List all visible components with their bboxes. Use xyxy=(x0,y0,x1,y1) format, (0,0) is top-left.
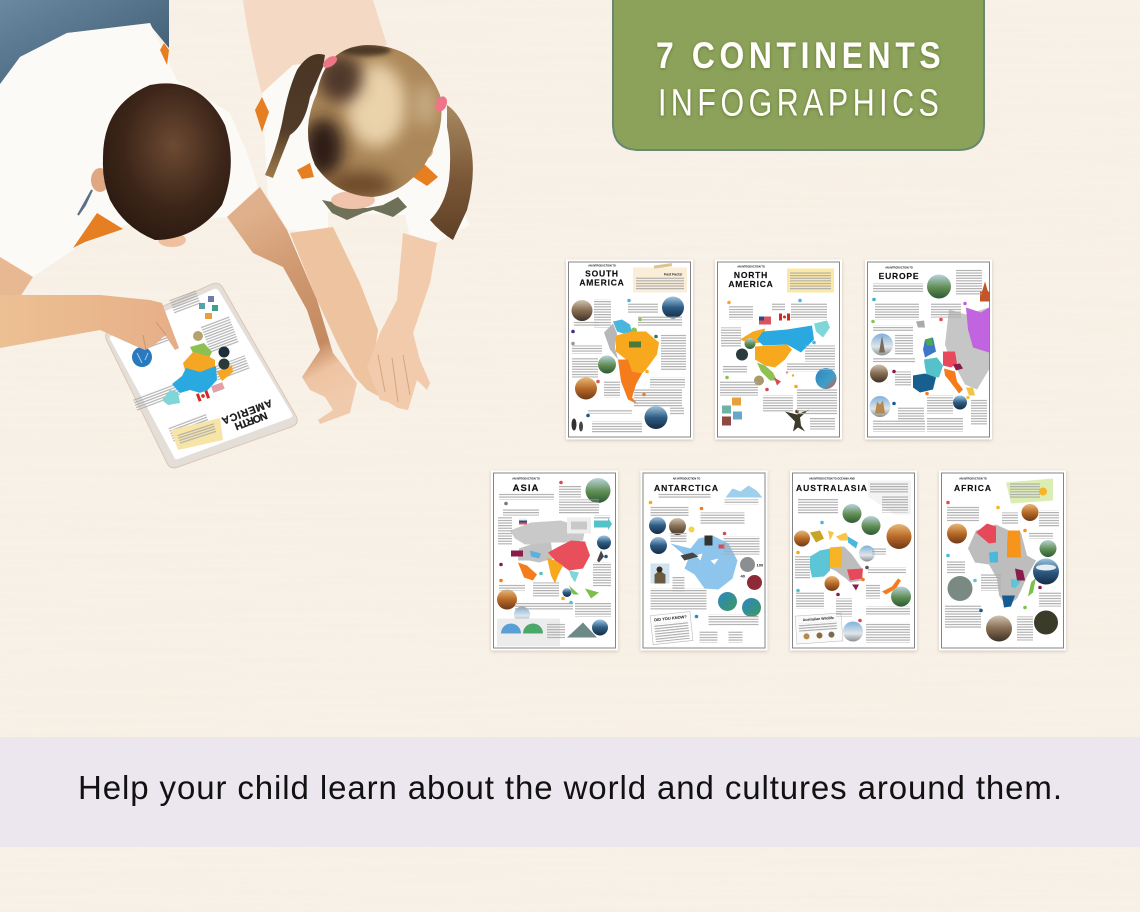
poster title: AMERICA xyxy=(728,279,774,289)
flags xyxy=(511,518,527,556)
numbers: 100 xyxy=(756,562,764,568)
section markers xyxy=(871,298,970,405)
poster title: AMERICA xyxy=(579,278,625,288)
title line 2: INFOGRAPHICS xyxy=(658,82,939,124)
numbers xyxy=(740,562,764,578)
poster title: AN INTRODUCTION TO OCEANIA AND xyxy=(809,478,855,480)
text blocks xyxy=(572,300,686,434)
text blocks xyxy=(650,494,760,642)
tablet screen: photo circles and flags xyxy=(132,296,230,402)
poster title: AUSTRALASIA xyxy=(796,483,868,493)
section markers xyxy=(499,481,608,604)
grey note xyxy=(868,480,911,514)
photos xyxy=(497,478,611,636)
poster title xyxy=(512,478,540,494)
did you know note xyxy=(650,612,693,645)
yellow note xyxy=(787,268,834,292)
St Basil's illustration xyxy=(980,282,990,302)
Australian wildlife note xyxy=(795,613,843,644)
poster title xyxy=(654,478,719,493)
photos xyxy=(794,504,912,642)
map xyxy=(913,308,989,396)
fast facts note xyxy=(633,263,687,292)
map xyxy=(968,524,1036,608)
tablet xyxy=(105,282,297,468)
poster: Antarctica xyxy=(640,470,768,650)
text blocks xyxy=(795,498,910,642)
photos xyxy=(722,338,836,426)
tablet screen: title upside down: AMERICA xyxy=(220,397,274,427)
poster title: NORTH xyxy=(734,270,768,280)
poster title: SOUTH xyxy=(585,268,619,278)
world minimap and arrow xyxy=(567,518,612,534)
text blocks xyxy=(873,270,987,432)
poster title: AN INTRODUCTION TO xyxy=(959,478,987,480)
photos xyxy=(572,296,684,432)
girl: pigtail right xyxy=(430,105,473,240)
section markers xyxy=(946,501,1042,612)
map xyxy=(604,320,659,404)
title banner xyxy=(613,0,984,150)
map xyxy=(670,536,738,590)
did you know note: DID YOU KNOW? xyxy=(654,614,688,622)
athlete figure xyxy=(785,410,809,432)
boy: head xyxy=(91,83,231,247)
fast facts note: Fast Facts! xyxy=(664,272,682,276)
poster title: EUROPE xyxy=(879,271,919,281)
poster title: AFRICA xyxy=(954,483,992,493)
flags xyxy=(759,314,790,324)
poster title: ASIA xyxy=(513,483,539,494)
girl: left arm and hand xyxy=(290,227,383,397)
caption text: Help your child learn about the world and cultures around them. xyxy=(78,769,1062,806)
title line 1: 7 CONTINENTS xyxy=(656,36,941,77)
poster title: AN INTRODUCTION TO xyxy=(588,264,616,268)
section markers xyxy=(571,299,658,417)
poster title: AN INTRODUCTION TO xyxy=(737,266,765,268)
photo: boy and girl using a tablet xyxy=(0,0,473,468)
girl: hair ties xyxy=(321,54,449,114)
numbers: 40 xyxy=(740,574,746,578)
poster title xyxy=(796,478,868,493)
poster title xyxy=(879,266,919,281)
tablet screen: title upside down: NORTH xyxy=(233,409,269,432)
section markers xyxy=(725,299,816,391)
poster: Australasia xyxy=(790,470,917,650)
poster: North America xyxy=(715,260,842,440)
map xyxy=(740,320,830,386)
text blocks xyxy=(945,506,1061,640)
girl: pigtail left xyxy=(265,54,325,178)
photos xyxy=(649,517,762,617)
boy: jeans xyxy=(0,0,169,168)
photos xyxy=(947,504,1059,642)
boy: shirt xyxy=(0,23,258,277)
poster title xyxy=(579,264,625,288)
poster title: AN INTRODUCTION TO xyxy=(885,266,913,270)
poster title xyxy=(954,478,992,493)
section markers xyxy=(649,501,726,618)
girl: shirt xyxy=(255,62,470,242)
girl: face and hair xyxy=(308,45,442,209)
poster title: ANTARCTICA xyxy=(654,483,719,493)
green note xyxy=(1006,478,1053,504)
text blocks xyxy=(498,486,611,638)
caption band xyxy=(0,737,1140,847)
poster: Asia xyxy=(491,470,618,650)
poster: Europe xyxy=(865,260,992,440)
boy: far arm and hand xyxy=(227,187,357,424)
poster: South America xyxy=(566,260,693,440)
Australian wildlife note: Australian Wildlife xyxy=(803,616,834,622)
bottom panel with mountain xyxy=(497,618,597,646)
iceberg illustration xyxy=(726,486,762,498)
tablet screen: text lines xyxy=(105,282,264,450)
photos xyxy=(870,274,967,417)
boy: near shoulder and arm with pointing hand xyxy=(0,257,179,350)
section markers xyxy=(796,521,869,622)
tablet screen: map xyxy=(162,343,233,405)
poster: Africa xyxy=(939,470,1066,650)
girl: right arm and hand xyxy=(367,233,437,410)
map xyxy=(810,530,901,594)
tablet screen: yellow note xyxy=(171,418,223,450)
text blocks xyxy=(720,304,837,430)
poster title: AN INTRODUCTION TO xyxy=(512,478,540,480)
poster title: AN INTRODUCTION TO xyxy=(673,478,700,480)
map xyxy=(510,520,604,598)
girl: legs xyxy=(243,0,387,95)
poster title xyxy=(728,266,774,289)
